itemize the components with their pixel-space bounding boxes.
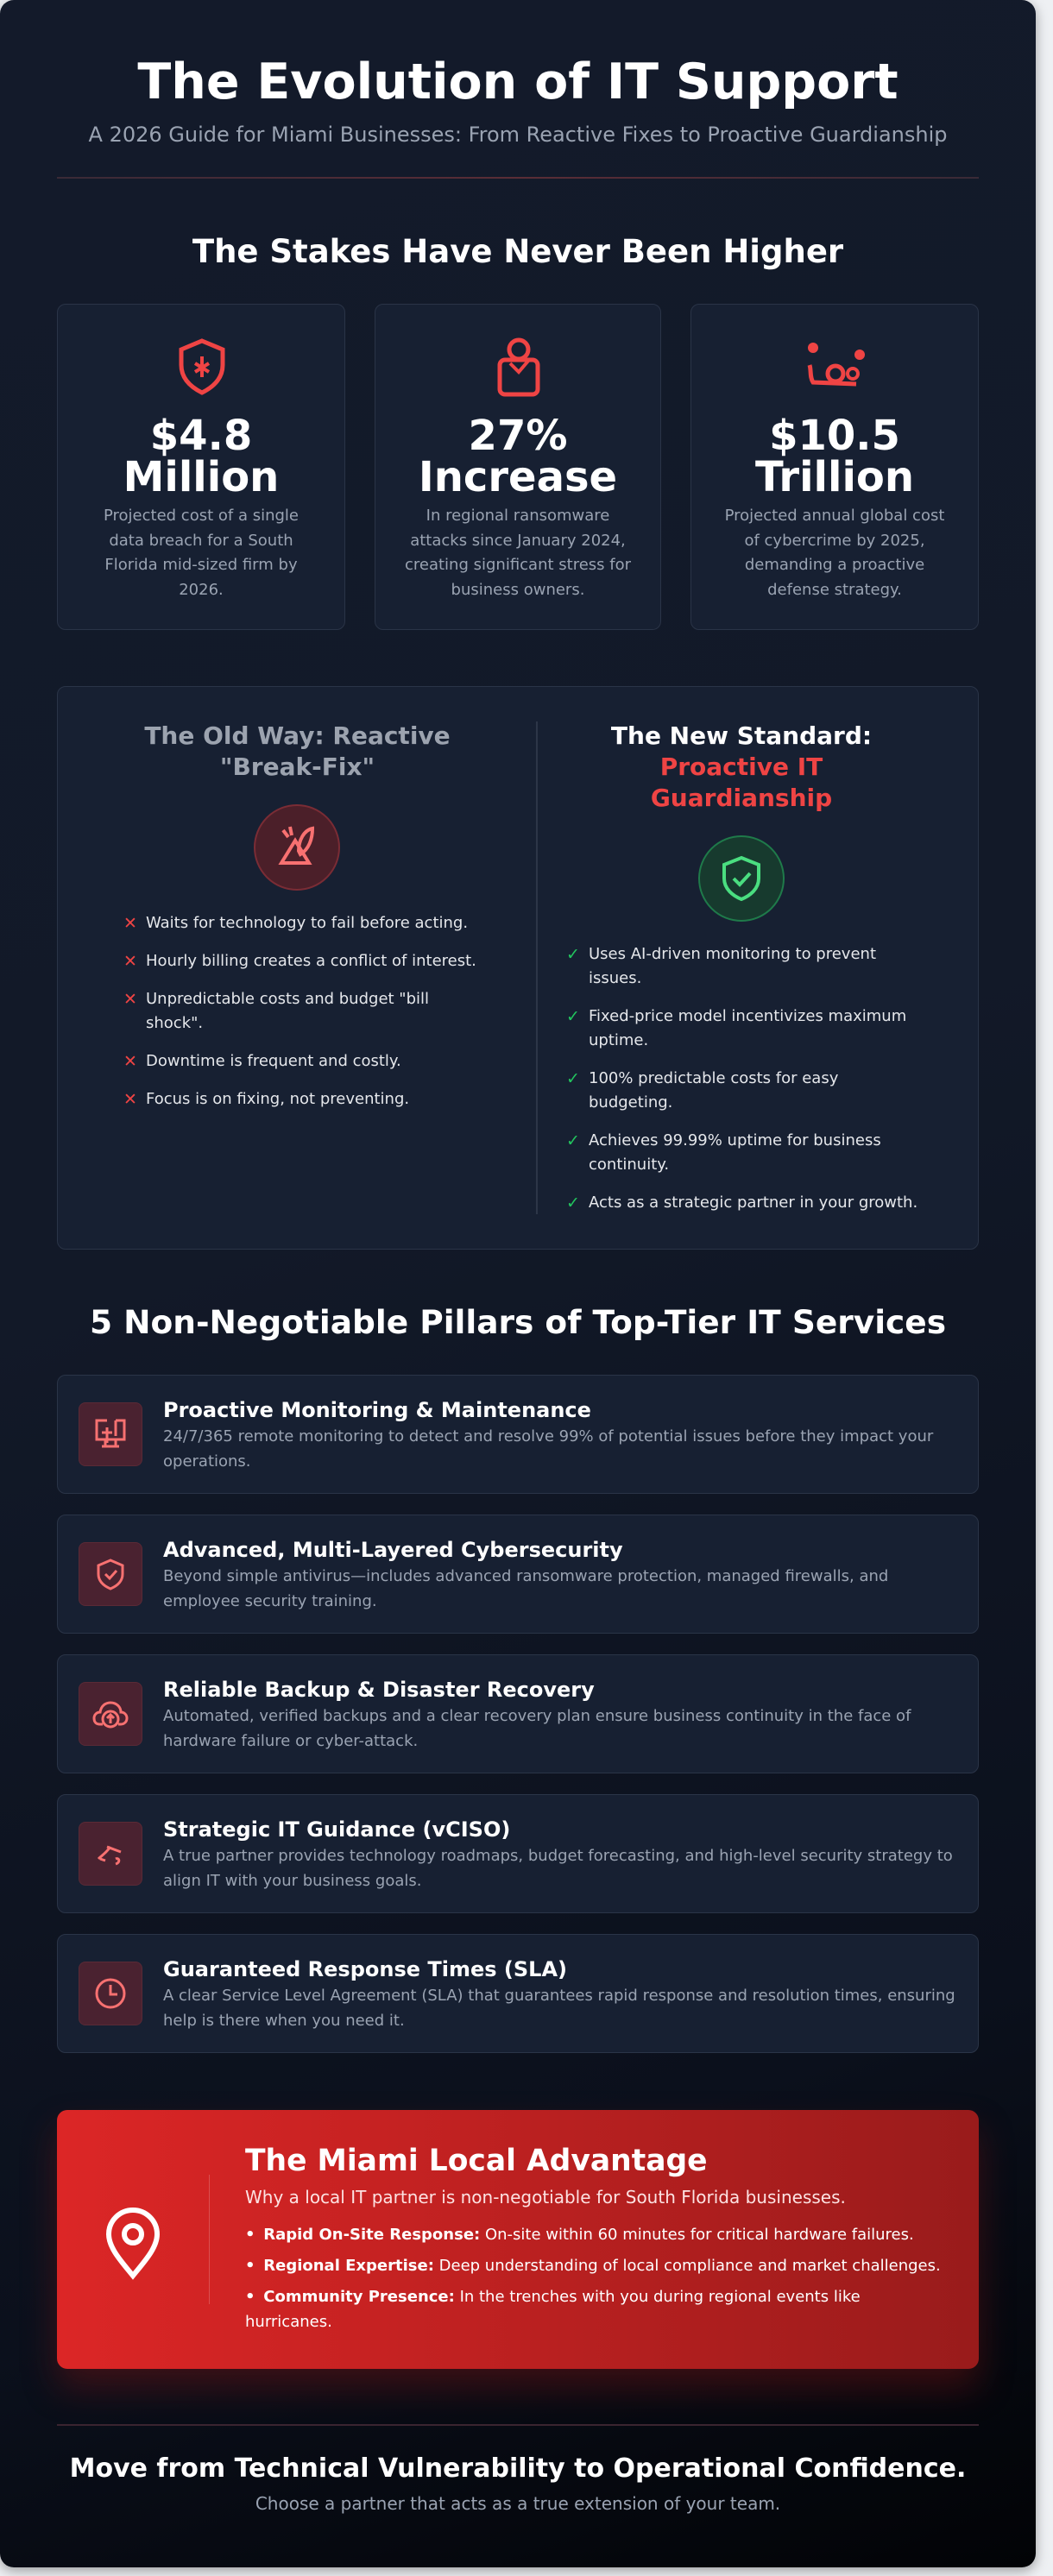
pillar 3: Reliable Backup & Disaster Recovery xyxy=(163,1678,595,1702)
stat card 2: 27% xyxy=(469,412,567,460)
icon: cybercrime xyxy=(808,343,865,387)
panel: comparison xyxy=(57,686,979,1250)
old way list: Waits for technology to fail before acting. xyxy=(146,914,468,932)
icon: shield check xyxy=(79,1542,142,1606)
new standard heading: Guardianship xyxy=(651,784,832,812)
closing subtext: Choose a partner that acts as a true extension of your team. xyxy=(255,2493,780,2514)
icon: broken xyxy=(254,804,340,891)
icon: shield bug xyxy=(180,338,224,395)
old way list: Hourly billing creates a conflict of interest. xyxy=(146,952,476,970)
icon: lock xyxy=(497,338,540,397)
icon: location pin xyxy=(106,2208,160,2280)
pillar 5 xyxy=(57,1934,979,2053)
new standard heading: Proactive IT xyxy=(660,753,823,781)
new standard list: Acts as a strategic partner in your growth. xyxy=(589,1194,917,1212)
stat card 1 xyxy=(57,304,345,630)
panel: comparison: ✓ xyxy=(566,945,580,964)
stat card 3: Projected annual global cost of cybercrime by 2025, demanding a proactive defense strategy. xyxy=(725,507,944,599)
icon: strategy xyxy=(79,1822,142,1886)
panel: comparison: ✕ xyxy=(123,1090,137,1109)
pillar 3: Automated, verified backups and a clear recovery plan ensure business continuity in the face of hardware failure or cyber-attack. xyxy=(163,1707,911,1750)
new standard list: Uses AI-driven monitoring to prevent issues. xyxy=(589,945,876,987)
pillar 2: Advanced, Multi-Layered Cybersecurity xyxy=(163,1538,623,1562)
pillar 1: 24/7/365 remote monitoring to detect and resolve 99% of potential issues before they impact your operations. xyxy=(163,1427,933,1471)
new standard list: 100% predictable costs for easy budgeting. xyxy=(589,1069,838,1112)
pillar 3 xyxy=(57,1654,979,1773)
pillar 1: Proactive Monitoring & Maintenance xyxy=(163,1398,591,1422)
pillar 1 xyxy=(57,1375,979,1494)
icon: clock xyxy=(79,1962,142,2025)
pillar 5: A clear Service Level Agreement (SLA) that guarantees rapid response and resolution times, ensuring help is there when you need it. xyxy=(163,1987,955,2030)
new standard list xyxy=(566,945,917,1212)
panel: comparison: ✓ xyxy=(566,1131,580,1150)
new standard heading xyxy=(611,721,872,812)
pillar 2: Beyond simple antivirus—includes advanced ransomware protection, managed firewalls, and employee security training. xyxy=(163,1567,888,1610)
old way heading: "Break-Fix" xyxy=(220,753,375,781)
panel: comparison: ✓ xyxy=(566,1069,580,1088)
stat card 3 xyxy=(690,304,979,630)
old way list: Focus is on fixing, not preventing. xyxy=(146,1090,409,1108)
old way list: Downtime is frequent and costly. xyxy=(146,1052,401,1070)
icon: green shield xyxy=(698,835,785,922)
stat card 2: Increase xyxy=(419,453,617,501)
pillar 4: Strategic IT Guidance (vCISO) xyxy=(163,1817,510,1842)
panel: comparison: ✕ xyxy=(123,1052,137,1071)
stat card 1: Million xyxy=(123,453,279,501)
new standard heading: The New Standard: xyxy=(611,721,872,750)
new standard list: Fixed-price model incentivizes maximum uptime. xyxy=(589,1007,906,1049)
callout bullets: • Community Presence: In the trenches with you during regional events like hurricanes. xyxy=(245,2288,861,2331)
pillar 5: Guaranteed Response Times (SLA) xyxy=(163,1957,567,1981)
stat card 2: In regional ransomware attacks since January 2024, creating significant stress for business owners. xyxy=(405,507,631,599)
heading: pillars: 5 Non-Negotiable Pillars of Top-Tier IT Services xyxy=(90,1303,946,1341)
stat card 3: Trillion xyxy=(755,453,914,501)
stat card 2 xyxy=(375,304,661,630)
panel: comparison: ✕ xyxy=(123,914,137,933)
panel: comparison: ✓ xyxy=(566,1194,580,1212)
old way list xyxy=(123,914,476,1109)
panel: comparison: ✓ xyxy=(566,1007,580,1026)
pillar 2 xyxy=(57,1515,979,1634)
panel: comparison: ✕ xyxy=(123,952,137,971)
subtitle: A 2026 Guide for Miami Businesses: From Reactive Fixes to Proactive Guardianship xyxy=(89,123,947,147)
pillar 4: A true partner provides technology roadmaps, budget forecasting, and high-level security strategy to align IT with your business goals. xyxy=(163,1847,953,1890)
new standard list: Achieves 99.99% uptime for business continuity. xyxy=(589,1131,881,1174)
panel: comparison: ✕ xyxy=(123,990,137,1009)
callout bullets: • Rapid On-Site Response: On-site within 60 minutes for critical hardware failures. xyxy=(245,2226,914,2244)
callout title: The Miami Local Advantage xyxy=(245,2144,708,2178)
title: The Evolution of IT Support xyxy=(137,54,899,110)
stat card 1: Projected cost of a single data breach for a South Florida mid-sized firm by 2026. xyxy=(104,507,299,599)
closing heading: Move from Technical Vulnerability to Operational Confidence. xyxy=(70,2453,966,2484)
old way heading xyxy=(144,721,451,781)
callout bullets: • Regional Expertise: Deep understanding of local compliance and market challenges. xyxy=(245,2257,941,2275)
old way heading: The Old Way: Reactive xyxy=(144,721,451,750)
callout bullets xyxy=(245,2226,941,2331)
old way list: Unpredictable costs and budget "bill shock". xyxy=(146,990,429,1032)
icon: cloud upload xyxy=(79,1682,142,1746)
stat card 1: $4.8 xyxy=(150,412,252,460)
callout: Miami local advantage xyxy=(57,2110,979,2369)
heading: stakes: The Stakes Have Never Been Higher xyxy=(192,233,843,270)
icon: monitor xyxy=(79,1402,142,1466)
callout subtitle: Why a local IT partner is non-negotiable for South Florida businesses. xyxy=(245,2187,846,2208)
stat card 3: $10.5 xyxy=(769,412,900,460)
pillar 4 xyxy=(57,1794,979,1913)
